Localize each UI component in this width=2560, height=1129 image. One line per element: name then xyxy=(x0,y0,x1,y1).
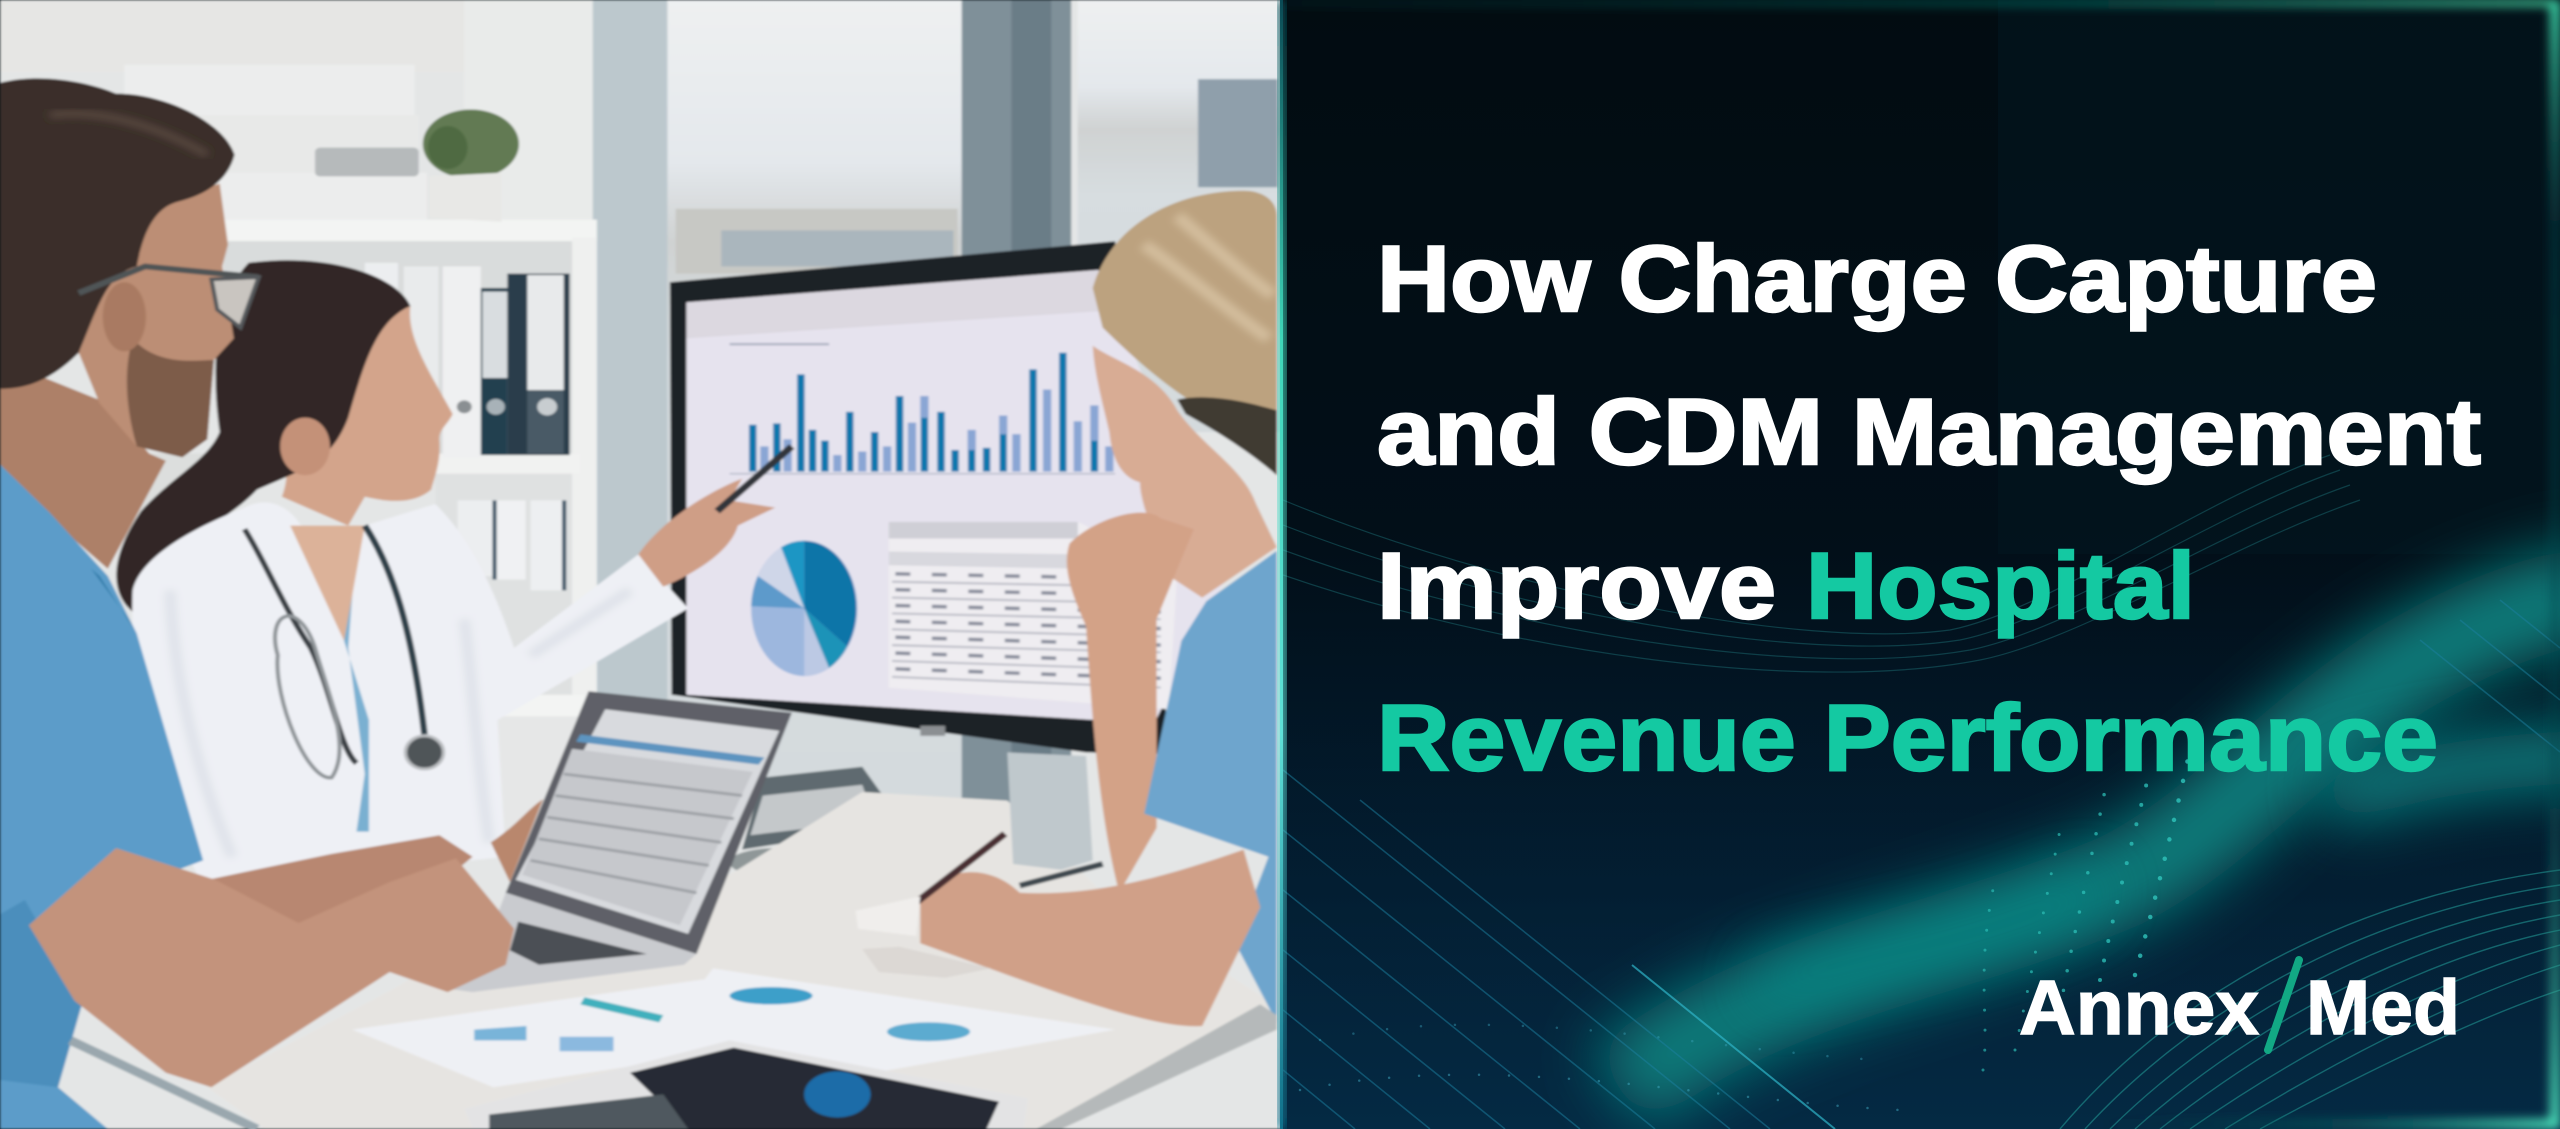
panel: dark title panel xyxy=(1283,0,2560,1129)
laptop xyxy=(431,691,792,992)
panel edge glow xyxy=(1283,0,2560,1129)
white shelving with binders xyxy=(126,66,598,716)
diagonal line pattern xyxy=(1283,600,2560,1129)
office background wall and windows xyxy=(0,0,1282,1129)
panel: office team photo illustration xyxy=(0,0,1282,1129)
man in blue scrubs xyxy=(0,78,514,1129)
title: and CDM Management xyxy=(1377,379,2481,484)
data table on monitor xyxy=(889,522,1177,709)
folders and desk accessories xyxy=(730,767,883,877)
monitor with charts xyxy=(670,241,1227,755)
title xyxy=(1377,226,2481,790)
title: How Charge Capture xyxy=(1377,226,2377,331)
pie chart on monitor xyxy=(751,541,857,676)
title: Improve xyxy=(1377,533,1776,638)
logo: AnnexMed xyxy=(2019,960,2460,1051)
blonde woman in blue scrubs xyxy=(856,191,1277,1129)
thin contour curves xyxy=(1283,455,2360,672)
papers with small charts on desk xyxy=(352,968,1115,1087)
teal flowing wave background xyxy=(1283,0,2560,1129)
divider glow line between photo and panel xyxy=(1278,0,1286,1129)
bar chart on monitor xyxy=(730,344,1115,474)
title: Hospital xyxy=(1806,533,2195,638)
title: Revenue Performance xyxy=(1377,685,2438,790)
woman doctor in white coat xyxy=(116,260,792,882)
logo: AnnexMed: Annex xyxy=(2019,965,2259,1051)
desk xyxy=(736,790,1012,878)
tablet on desk xyxy=(464,1040,1028,1129)
dotted particle streams xyxy=(1300,750,2190,1110)
logo: AnnexMed: Med xyxy=(2306,965,2460,1051)
